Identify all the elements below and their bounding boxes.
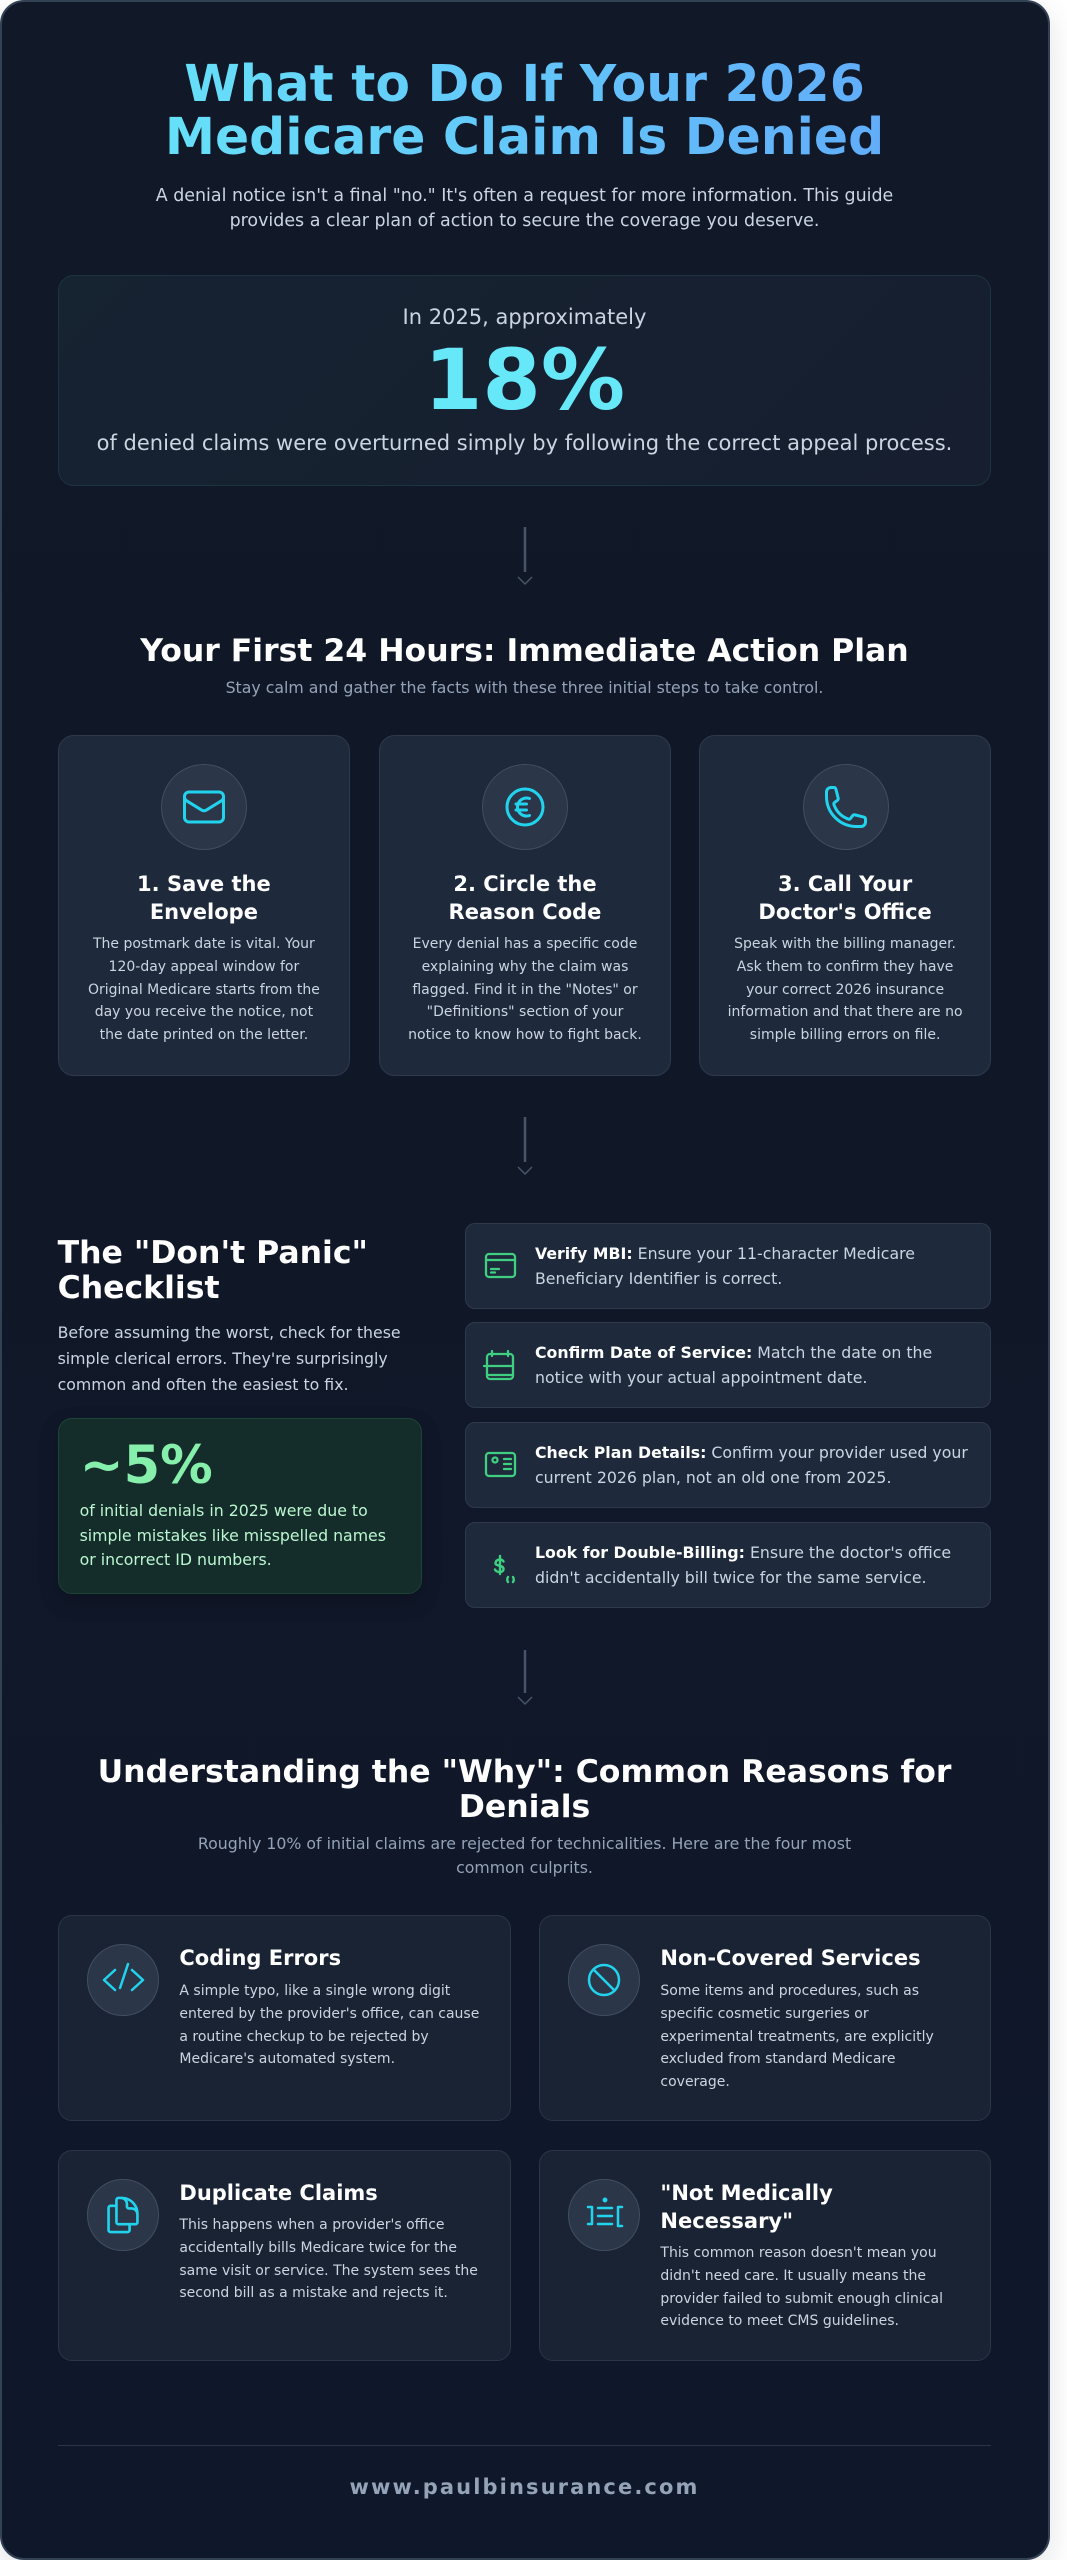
- step 1 title: [137, 872, 271, 924]
- item text: [535, 1343, 932, 1386]
- icon: duplicate documents: [87, 2179, 159, 2251]
- step 1 text: day you receive the notice, not: [95, 1004, 313, 1020]
- step 1 text: The postmark date is vital. Your: [93, 936, 315, 952]
- icon: dollar: [494, 1554, 515, 1584]
- step 2 text: flagged. Find it in the "Notes" or: [412, 982, 638, 998]
- step 1 text: the date printed on the letter.: [100, 1027, 308, 1043]
- checklist intro text: [58, 1323, 401, 1394]
- stat caption: of denied claims were overturned simply by following the correct appeal process.: [97, 431, 952, 455]
- item text: Confirm Date of Service: Match the date on the: [535, 1343, 932, 1362]
- heading: checklist: [58, 1235, 368, 1306]
- step 2 title: 2. Circle the: [453, 872, 597, 896]
- step 3 text: information and that there are no: [728, 1004, 963, 1020]
- panel: not medically necessary: [539, 2150, 991, 2361]
- callout number: ~5%: [80, 1435, 213, 1496]
- intro text: provides a clear plan of action to secure the coverage you deserve.: [230, 211, 819, 231]
- item text: [535, 1543, 951, 1586]
- reason text: This common reason doesn't mean you: [660, 2245, 937, 2261]
- step 3 text: Ask them to confirm they have: [737, 959, 953, 975]
- callout: 5 percent statistic: [58, 1418, 422, 1594]
- arrow: to checklist: [518, 1117, 532, 1175]
- item text: current 2026 plan, not an old one from 2025.: [535, 1468, 891, 1486]
- reason title: Necessary": [660, 2209, 793, 2233]
- title: Medicare Claim Is Denied: [165, 107, 884, 166]
- reason title: [660, 2181, 833, 2233]
- panel: verify MBI: [464, 1223, 991, 1309]
- title: What to Do If Your 2026: [184, 54, 865, 113]
- subheading: reasons: Roughly 10% of initial claims are rejected for technicalities. Here are the four most: [198, 1834, 851, 1853]
- subheading: first 24 hours: Stay calm and gather the facts with these three initial steps to take control.: [226, 678, 823, 697]
- reason text: second bill as a mistake and rejects it.: [179, 2285, 448, 2301]
- reason text: experimental treatments, are explicitly: [660, 2028, 934, 2044]
- reason text: [179, 1983, 479, 2067]
- icon: calendar: [482, 1350, 514, 1380]
- step 3 text: Speak with the billing manager.: [734, 936, 956, 952]
- step 1 text: Original Medicare starts from the: [88, 982, 320, 998]
- step 2 title: Reason Code: [449, 900, 601, 924]
- step 1 title: Envelope: [150, 900, 258, 924]
- panel: step 2: [379, 735, 671, 1076]
- panel: headline statistic: [58, 275, 991, 486]
- reason text: same visit or service. The system sees the: [179, 2262, 478, 2278]
- heading: first 24 hours: Your First 24 Hours: Immediate Action Plan: [140, 633, 909, 669]
- reason text: provider failed to submit enough clinical: [660, 2290, 943, 2306]
- arrow: to first 24 hours: [518, 527, 532, 585]
- panel: coding errors: [58, 1915, 511, 2121]
- step 3 title: Doctor's Office: [758, 900, 932, 924]
- item text: Beneficiary Identifier is correct.: [535, 1268, 782, 1288]
- stat lead-in: In 2025, approximately: [403, 305, 646, 329]
- reason text: a routine checkup to be rejected by: [179, 2028, 429, 2044]
- panel: non-covered services: [539, 1915, 991, 2121]
- icon: envelope: [161, 764, 247, 850]
- checklist intro text: simple clerical errors. They're surprisingly: [58, 1349, 388, 1368]
- heading: checklist: The "Don't Panic": [58, 1235, 368, 1271]
- reason text: entered by the provider's office, can cause: [179, 2006, 479, 2022]
- step 3 text: your correct 2026 insurance: [746, 982, 944, 998]
- item text: [535, 1443, 968, 1486]
- step 2 text: "Definitions" section of your: [427, 1004, 623, 1020]
- step 1 text: 120-day appeal window for: [109, 959, 299, 975]
- panel: step 3: [699, 735, 991, 1076]
- panel: step 1: [58, 735, 350, 1076]
- icon: euro coin: [482, 764, 568, 850]
- intro text: [156, 186, 893, 231]
- step 2 text: [408, 936, 642, 1043]
- reason text: [660, 2245, 943, 2329]
- step 2 title: [449, 872, 601, 924]
- reason text: [179, 2217, 478, 2301]
- step 1 text: [88, 936, 320, 1043]
- reason text: evidence to meet CMS guidelines.: [660, 2313, 899, 2329]
- reason text: This happens when a provider's office: [179, 2217, 445, 2233]
- subheading: reasons: [198, 1834, 851, 1877]
- callout text: of initial denials in 2025 were due to: [80, 1501, 368, 1520]
- checklist intro text: common and often the easiest to fix.: [58, 1375, 349, 1394]
- step 3 title: 3. Call Your: [778, 872, 912, 896]
- step 3 title: [758, 872, 932, 924]
- reason text: specific cosmetic surgeries or: [660, 2006, 869, 2022]
- reason title: Non-Covered Services: [660, 1946, 921, 1970]
- checklist intro text: Before assuming the worst, check for these: [58, 1323, 401, 1342]
- callout text: simple mistakes like misspelled names: [80, 1526, 386, 1544]
- item text: didn't accidentally bill twice for the same service.: [535, 1568, 927, 1586]
- callout text: or incorrect ID numbers.: [80, 1550, 272, 1569]
- reason title: "Not Medically: [660, 2181, 833, 2205]
- step 2 text: notice to know how to fight back.: [408, 1027, 642, 1043]
- reason title: Coding Errors: [179, 1946, 341, 1970]
- reason text: accidentally bills Medicare twice for the: [179, 2240, 457, 2256]
- panel: check plan details: [464, 1422, 991, 1508]
- heading: reasons: Denials: [459, 1789, 590, 1825]
- step 1 title: 1. Save the: [137, 872, 271, 896]
- icon: clinical document: [568, 2179, 640, 2251]
- item text: Check Plan Details: Confirm your provider used your: [535, 1443, 968, 1462]
- reason text: didn't need care. It usually means the: [660, 2268, 926, 2284]
- callout text: [80, 1501, 386, 1569]
- panel: confirm date: [464, 1322, 991, 1408]
- icon: card: [484, 1252, 516, 1278]
- step 2 text: Every denial has a specific code: [413, 936, 637, 952]
- reason text: excluded from standard Medicare: [660, 2051, 895, 2067]
- item text: Look for Double-Billing: Ensure the doctor's office: [535, 1543, 951, 1562]
- icon: phone: [803, 764, 889, 850]
- reason text: Medicare's automated system.: [179, 2051, 395, 2067]
- intro text: A denial notice isn't a final "no." It's often a request for more information. This guide: [156, 186, 893, 206]
- icon: code brackets: [87, 1944, 159, 2016]
- step 3 text: simple billing errors on file.: [750, 1027, 940, 1043]
- item text: notice with your actual appointment date.: [535, 1368, 867, 1386]
- heading: reasons: [98, 1754, 952, 1825]
- title: [58, 58, 991, 164]
- subheading: reasons: common culprits.: [456, 1858, 593, 1877]
- reason text: Some items and procedures, such as: [660, 1983, 919, 1999]
- reason text: A simple typo, like a single wrong digit: [179, 1983, 450, 1999]
- step 3 text: [728, 936, 963, 1043]
- heading: reasons: Understanding the "Why": Common Reasons for: [98, 1754, 951, 1790]
- step 2 text: explaining why the claim was: [422, 959, 628, 975]
- stat number: 18%: [424, 331, 625, 429]
- panel: duplicate claims: [58, 2150, 511, 2361]
- reason title: Duplicate Claims: [179, 2181, 378, 2205]
- item text: [535, 1244, 915, 1288]
- reason text: coverage.: [660, 2074, 730, 2090]
- icon: ID card: [484, 1452, 516, 1478]
- panel: double billing: [464, 1522, 991, 1608]
- reason text: [660, 1983, 934, 2090]
- arrow: to reasons: [518, 1650, 532, 1705]
- footer website: www.paulbinsurance.com: [350, 2475, 699, 2499]
- heading: checklist: Checklist: [58, 1270, 220, 1306]
- item text: Verify MBI: Ensure your 11-character Medicare: [535, 1244, 915, 1263]
- icon: prohibited: [568, 1944, 640, 2016]
